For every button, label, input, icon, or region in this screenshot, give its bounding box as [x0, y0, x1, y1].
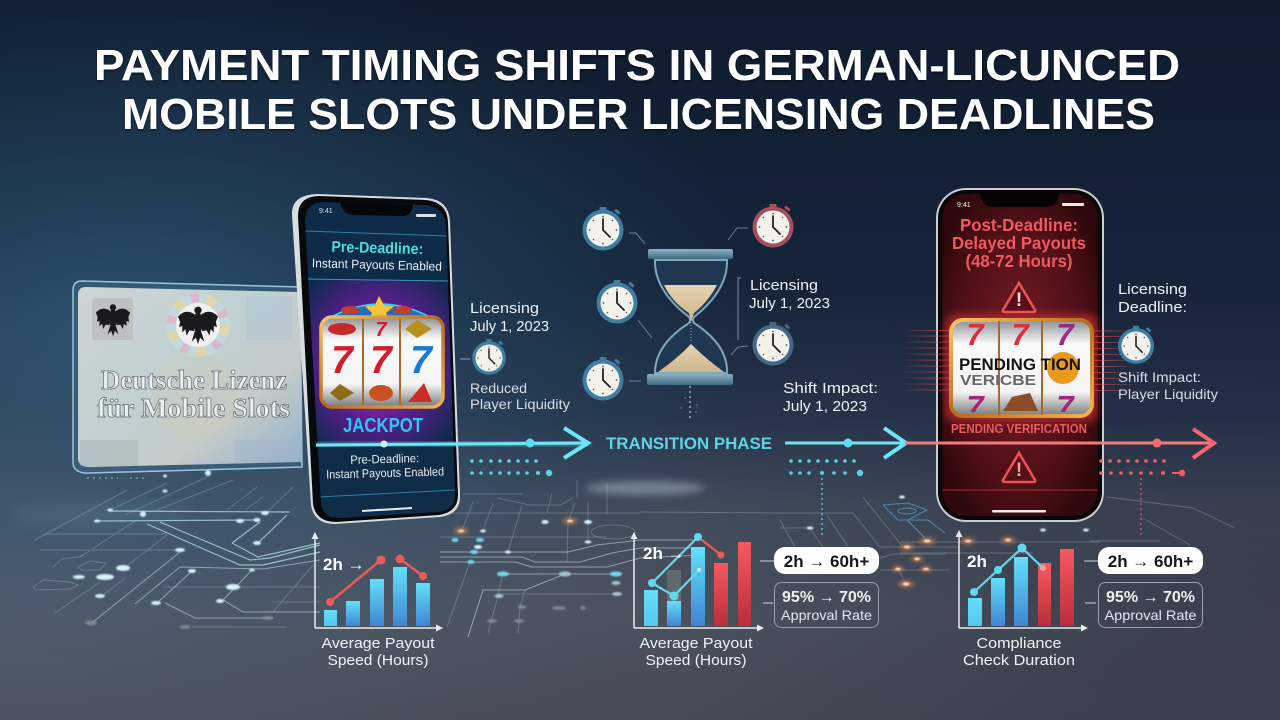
callout: post-deadline payout time: [1084, 547, 1203, 603]
flow arrow: transition: [785, 428, 906, 536]
slot reels: 7: [370, 339, 394, 382]
card text: Deutsche Lizenz: [101, 365, 287, 395]
warning icon top: [1003, 283, 1035, 312]
status bar: 9:41: [319, 208, 333, 215]
phone heading: (48-72 Hours): [966, 251, 1072, 271]
annotation: licensing centre: Licensing: [750, 277, 818, 294]
callout: transition approval rate: 95% → 70%: [782, 589, 871, 606]
holographic seal: [166, 293, 230, 357]
phone: post-deadline: [900, 188, 1140, 522]
slot reels frozen: VERICBE: [960, 373, 1036, 389]
pending verification: PENDING VERIFICATION: [951, 421, 1087, 436]
title: MOBILE SLOTS UNDER LICENSING DEADLINES: [122, 90, 1155, 139]
annotation: licensing centre: [738, 277, 830, 340]
chart: average payout speed, pre-deadline: 2h →: [323, 555, 365, 574]
annotation: licensing left: Reduced: [470, 380, 527, 396]
title: PAYMENT TIMING SHIFTS IN GERMAN-LICUNCED: [94, 41, 1180, 90]
flow arrow: post-deadline: [905, 429, 1214, 536]
annotation: shift impact: [783, 380, 878, 415]
chart: compliance check duration: 2h: [967, 552, 987, 571]
licence card: [73, 281, 302, 478]
chart: compliance check duration: [956, 530, 1088, 669]
slot reels: 7: [375, 319, 387, 341]
screen heading: Instant Payouts Enabled: [312, 256, 442, 274]
warning icon bottom: [1003, 453, 1035, 482]
annotation: shift impact: Shift Impact:: [783, 380, 878, 397]
stopwatches around hourglass: [582, 204, 794, 400]
slot reels frozen: PENDING TION: [959, 355, 1081, 374]
phone: pre-deadline: [290, 194, 465, 525]
slot reels frozen: 7: [966, 389, 985, 424]
jackpot text: JACKPOT: [343, 415, 423, 437]
lower caption: [326, 450, 444, 482]
notch: [980, 193, 1059, 207]
screen heading: Pre-Deadline:: [331, 239, 424, 258]
home bar: [362, 508, 412, 511]
title: [94, 41, 1180, 139]
chart: compliance check duration: Compliance: [976, 635, 1062, 652]
warning icon top: !: [1016, 290, 1022, 311]
chart: average payout speed, transition: [630, 532, 764, 669]
slot reels: 7: [331, 339, 355, 382]
annotation: licensing left: Licensing: [470, 300, 539, 317]
lower caption: Pre-Deadline:: [350, 451, 419, 467]
annotation: licensing left: [460, 300, 570, 412]
annotation: licensing deadline: Player Liquidity: [1118, 386, 1218, 402]
slot backdrop: [305, 231, 455, 497]
phone heading: [952, 215, 1086, 271]
callout: transition payout time: [760, 547, 879, 603]
flow arrow: pre-deadline: [316, 428, 590, 476]
circuit glow nodes: [73, 470, 1089, 629]
annotation: licensing deadline: [1118, 281, 1218, 402]
chart: average payout speed, pre-deadline: Average Payout: [322, 635, 435, 652]
transition phase label: TRANSITION PHASE: [606, 434, 772, 453]
chart: average payout speed, pre-deadline: [312, 532, 443, 669]
callout: transition approval rate: Approval Rate: [781, 607, 872, 623]
phone heading: Delayed Payouts: [952, 233, 1086, 253]
card text: für Mobile Slots: [97, 393, 290, 423]
callout: post-deadline approval rate: Approval Rate: [1104, 607, 1197, 623]
chart: average payout speed, transition: 2h →: [643, 544, 685, 563]
screen heading: [312, 238, 443, 274]
callout: post-deadline approval rate: [1098, 582, 1202, 628]
hourglass: [647, 249, 733, 418]
annotation: licensing left: July 1, 2023: [470, 318, 549, 335]
slot reels frozen: 7: [1011, 317, 1030, 352]
slot reels frozen: 7: [1056, 317, 1075, 352]
card text: [97, 365, 290, 423]
warning icon bottom: !: [1016, 460, 1022, 481]
circuit board pattern: [10, 477, 1235, 637]
chart: average payout speed, pre-deadline: Speed (Hours): [328, 652, 429, 669]
slot reels frozen: 7: [1056, 389, 1075, 424]
callout: post-deadline payout time: 2h → 60h+: [1108, 552, 1193, 571]
annotation: licensing centre: July 1, 2023: [749, 295, 830, 312]
slot reels frozen: 7: [966, 317, 985, 352]
callout: transition approval rate: [774, 582, 878, 628]
status bar: 9:41: [957, 202, 971, 209]
phone heading: Post-Deadline:: [960, 215, 1078, 235]
slot reels: 7: [410, 339, 434, 382]
annotation: licensing deadline: Licensing: [1118, 281, 1187, 298]
callout: post-deadline approval rate: 95% → 70%: [1106, 589, 1195, 606]
annotation: shift impact: July 1, 2023: [783, 398, 867, 415]
small eagle stamp: [92, 298, 133, 340]
red streaks: [900, 330, 1140, 390]
home bar: [992, 510, 1046, 512]
slot marquee: [333, 296, 428, 318]
annotation: licensing deadline: Shift Impact:: [1118, 369, 1201, 385]
notch: [340, 202, 413, 216]
slot reels: [321, 317, 443, 407]
chart: average payout speed, transition: Average Payout: [640, 635, 753, 652]
annotation: licensing left: Player Liquidity: [470, 396, 570, 412]
callout: transition payout time: 2h → 60h+: [784, 552, 869, 571]
slot reels frozen: [951, 317, 1092, 424]
lower caption: Instant Payouts Enabled: [326, 464, 444, 482]
chart: average payout speed, transition: Speed (Hours): [646, 652, 747, 669]
annotation: licensing deadline: Deadline:: [1118, 299, 1187, 316]
chart: compliance check duration: Check Duration: [963, 652, 1075, 669]
